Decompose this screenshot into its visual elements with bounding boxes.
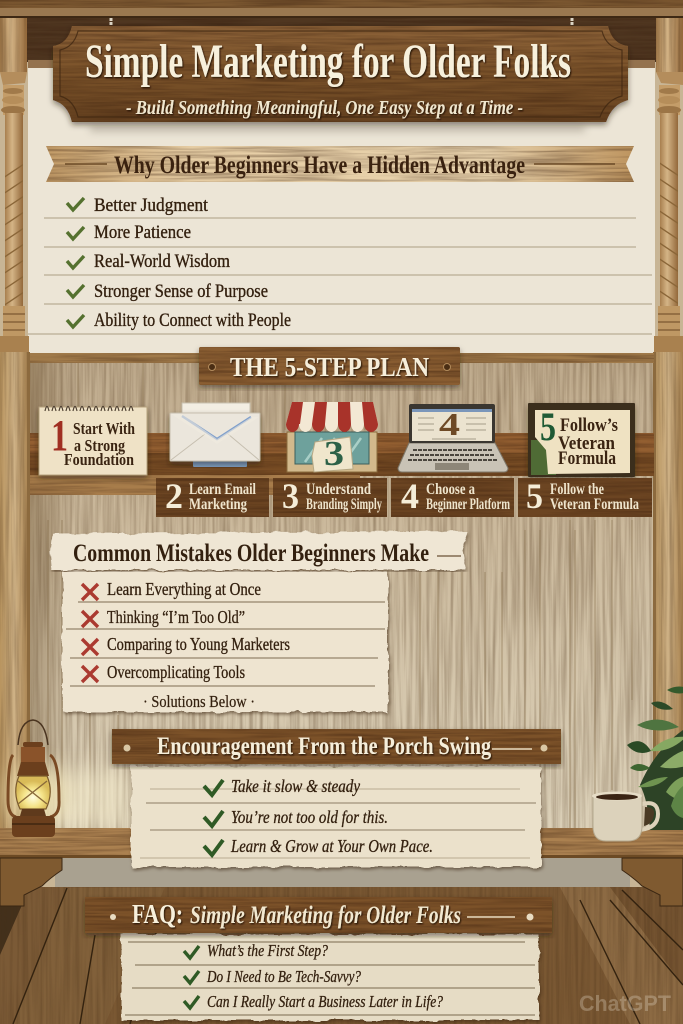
faq: tech-savvy: Do I Need to Be Tech-Savvy? bbox=[206, 967, 361, 986]
number note bbox=[312, 437, 353, 472]
step 1: notepad: a Strong bbox=[74, 436, 125, 455]
heading: faq sign: Simple Marketing for Older Folks bbox=[190, 902, 461, 929]
step 5: framed note: Follow’s bbox=[560, 415, 618, 436]
heading: the 5-step plan: THE 5-STEP PLAN bbox=[230, 352, 429, 382]
step label 4 bbox=[391, 476, 514, 517]
heading: encouragement sign bbox=[112, 729, 561, 764]
advantage: connect with people: Ability to Connect with People bbox=[94, 311, 291, 331]
step 3: storefront icon bbox=[286, 402, 378, 473]
right bracket bbox=[622, 858, 683, 906]
faq: first step: What’s the First Step? bbox=[207, 941, 328, 960]
step 5: framed note: Veteran bbox=[558, 433, 615, 454]
advantage: more patience: More Patience bbox=[94, 223, 191, 243]
step 4: laptop icon: 4 bbox=[439, 406, 460, 442]
panel: common mistakes bbox=[50, 531, 468, 712]
heading: hidden advantage banner bbox=[46, 146, 634, 182]
lower wood plank wall bbox=[28, 355, 655, 835]
panel: faq bbox=[85, 897, 552, 1020]
heading: faq sign: FAQ: bbox=[132, 899, 183, 929]
panel: advantages list bbox=[28, 196, 652, 334]
step label 2: 2 bbox=[165, 476, 183, 516]
heading: hidden advantage banner: Why Older Beginners Have a Hidden Advantage bbox=[114, 152, 525, 179]
left porch post bbox=[0, 18, 30, 828]
title sign bbox=[53, 18, 628, 131]
top roof beam bbox=[0, 0, 683, 68]
encouragement paper bbox=[131, 766, 541, 867]
advantage: real-world wisdom: Real-World Wisdom bbox=[94, 252, 231, 272]
heading: the 5-step plan bbox=[30, 347, 654, 385]
icon: lantern bbox=[3, 720, 63, 837]
step label 4: Choose a bbox=[426, 481, 475, 498]
step label 4: Beginner Platform bbox=[426, 496, 510, 513]
step label 3: 3 bbox=[282, 476, 299, 516]
heading: encouragement sign: Encouragement From the Porch Swing bbox=[157, 733, 491, 760]
step label 2: Learn Email bbox=[189, 481, 256, 498]
step 2: envelope icon bbox=[170, 403, 260, 467]
step label 5: Follow the bbox=[550, 481, 604, 498]
encouragement: own pace: Learn & Grow at Your Own Pace. bbox=[230, 836, 433, 856]
encouragement: not too old: You’re not too old for this. bbox=[231, 807, 388, 827]
faq: start later in life: Can I Really Start a Business Later in Life? bbox=[207, 992, 443, 1011]
encouragement: take it slow: Take it slow & steady bbox=[231, 776, 360, 796]
lower post bbox=[654, 352, 683, 828]
mistakes paper bbox=[62, 571, 388, 712]
advantage: better judgment: Better Judgment bbox=[94, 196, 209, 216]
step label 3: Understand bbox=[306, 481, 371, 498]
step 5: framed note: Formula bbox=[558, 448, 616, 469]
step 1: notepad: Foundation bbox=[64, 450, 134, 469]
icon: spiral binding bbox=[45, 406, 133, 411]
mistake: overcomplicating: Overcomplicating Tools bbox=[107, 662, 245, 682]
upper cream wall bbox=[28, 66, 655, 356]
lower post bbox=[0, 352, 29, 828]
step label 5: 5 bbox=[526, 476, 543, 516]
step 3: storefront icon: 3 bbox=[324, 434, 344, 473]
heading: common mistakes bbox=[50, 531, 468, 570]
step label 3 bbox=[273, 476, 387, 517]
step label 2 bbox=[156, 476, 269, 517]
step 1: notepad bbox=[39, 406, 147, 475]
faq paper bbox=[121, 934, 539, 1020]
step 5: framed note bbox=[528, 403, 635, 477]
mistake: learn everything: Learn Everything at Once bbox=[107, 579, 261, 599]
watermark: ChatGPT bbox=[579, 991, 672, 1016]
shelf behind the steps bbox=[30, 433, 654, 495]
heading: faq sign bbox=[85, 897, 552, 933]
porch shelf with brackets bbox=[0, 828, 683, 906]
advantage: sense of purpose: Stronger Sense of Purpose bbox=[94, 282, 268, 302]
left bracket bbox=[0, 858, 62, 906]
mistake: too old: Thinking “I’m Too Old” bbox=[107, 607, 245, 627]
icon: plant leaves bbox=[627, 686, 683, 830]
step label 2: Marketing bbox=[189, 496, 247, 513]
step 5: framed note: 5 bbox=[540, 404, 556, 449]
mistake: comparing: Comparing to Young Marketers bbox=[107, 634, 290, 654]
step 1: notepad: Start With bbox=[73, 419, 135, 438]
floor planks bbox=[0, 887, 683, 1024]
step 4: laptop icon bbox=[398, 404, 508, 472]
faq: tech-savvy bbox=[184, 967, 361, 986]
right porch post bbox=[653, 18, 683, 828]
icon: coffee mug bbox=[592, 792, 658, 841]
subtitle: - Build Something Meaningful, One Easy Step at a Time - bbox=[126, 97, 523, 119]
icon: hanging ropes bbox=[111, 18, 572, 38]
step label 5 bbox=[518, 476, 652, 517]
awning bbox=[286, 402, 378, 432]
panel: encouragement bbox=[112, 729, 561, 867]
area beneath shelf bbox=[55, 857, 630, 889]
step 1: notepad: 1 bbox=[51, 411, 68, 460]
heading: common mistakes: Common Mistakes Older Beginners Make bbox=[73, 540, 429, 567]
step label 4: 4 bbox=[401, 476, 419, 516]
solutions note: · Solutions Below · bbox=[143, 692, 255, 711]
step label 3: Branding Simply bbox=[306, 496, 382, 513]
step label 5: Veteran Formula bbox=[550, 496, 639, 513]
